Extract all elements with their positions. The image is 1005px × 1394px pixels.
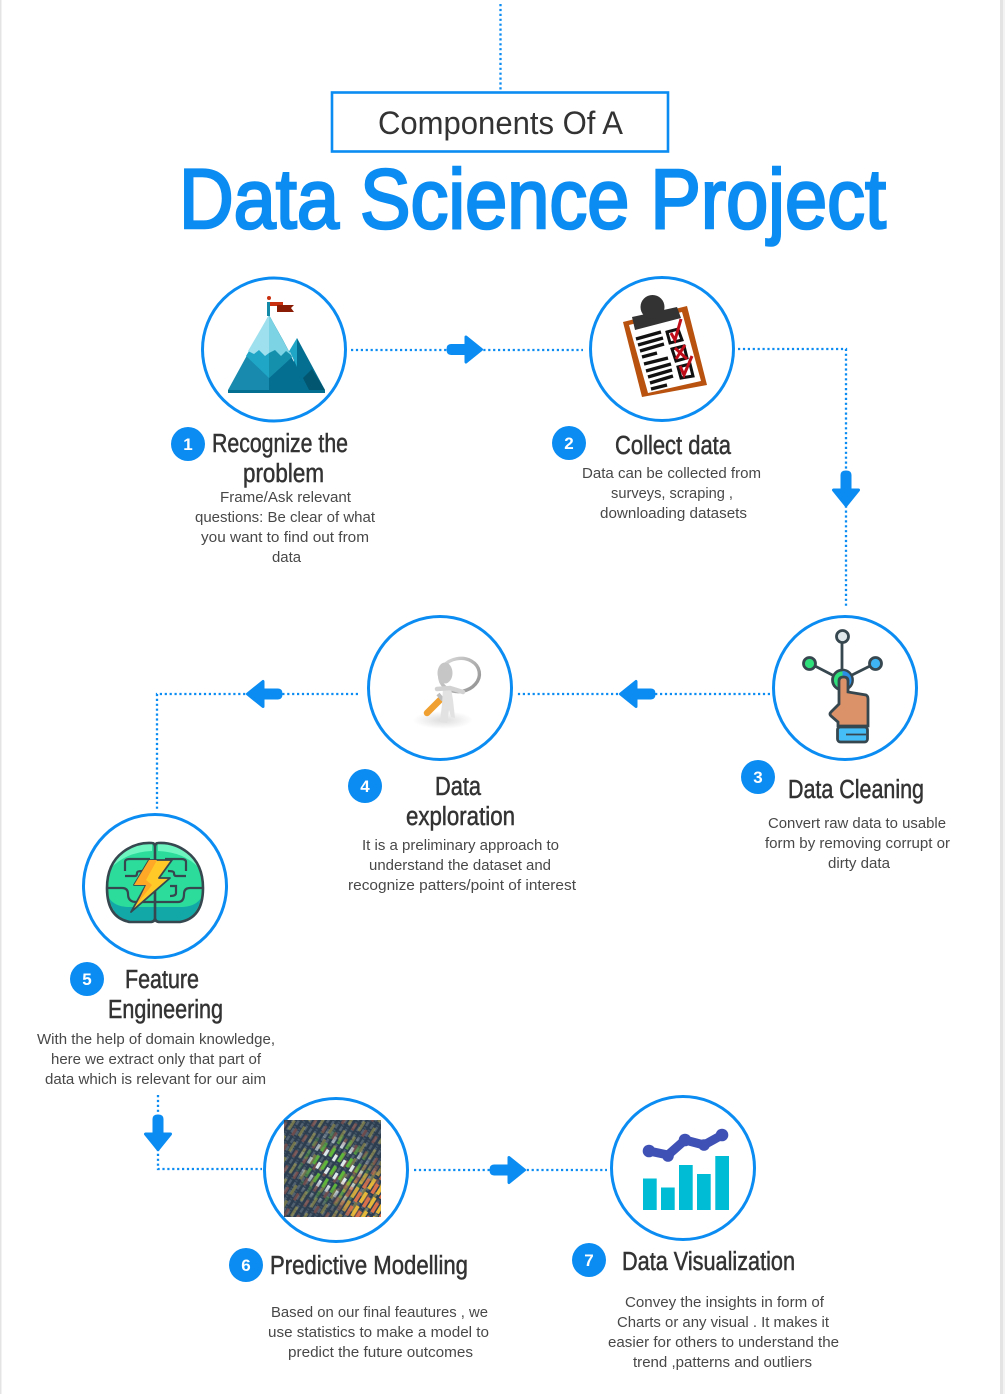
connector: top line into title xyxy=(499,4,502,92)
panel: step 4 data exploration xyxy=(348,616,576,894)
description: questions: Be clear of what xyxy=(195,510,375,526)
description: Frame/Ask relevant xyxy=(220,490,351,506)
description xyxy=(608,1295,839,1371)
heading: Engineering xyxy=(108,996,223,1024)
connector: step 3 to step 4 xyxy=(516,682,770,706)
connector: step 2 to step 3 xyxy=(738,349,858,608)
heading: Data Visualization xyxy=(622,1248,795,1276)
panel: step 5 feature engineering xyxy=(37,814,275,1088)
heading: Recognize the xyxy=(212,430,348,458)
icon: mountain with flag xyxy=(228,296,325,393)
panel: step 6 predictive modelling xyxy=(229,1098,489,1361)
panel: step 7 data visualization xyxy=(572,1096,839,1371)
number badge 1: 1 xyxy=(183,435,193,454)
number badge 1 xyxy=(171,427,205,461)
panel: step 2 collect data xyxy=(552,278,761,522)
description: Data can be collected from xyxy=(582,466,761,482)
title box: Components Of A: Components Of A xyxy=(378,105,624,141)
description: trend ,patterns and outliers xyxy=(633,1355,812,1371)
connector: step 6 to step 7 xyxy=(414,1158,607,1182)
description xyxy=(765,816,950,872)
number badge 4 xyxy=(348,769,382,803)
number badge 6: 6 xyxy=(241,1256,251,1275)
description: understand the dataset and xyxy=(369,858,551,874)
number badge 5 xyxy=(70,962,104,996)
main title: Data Science Project xyxy=(179,152,886,246)
number badge 6 xyxy=(229,1248,263,1282)
description: It is a preliminary approach to xyxy=(362,838,559,854)
description: predict the future outcomes xyxy=(288,1345,473,1361)
description: data which is relevant for our aim xyxy=(45,1072,266,1088)
heading: exploration xyxy=(406,803,515,831)
image: code on a screen xyxy=(284,1120,381,1217)
heading: problem xyxy=(243,460,324,488)
connector: step 5 to step 6 xyxy=(146,1095,262,1169)
description: With the help of domain knowledge, xyxy=(37,1032,275,1048)
description xyxy=(37,1032,275,1088)
number badge 7 xyxy=(572,1243,606,1277)
heading xyxy=(108,966,223,1024)
heading xyxy=(212,430,348,488)
number badge 2 xyxy=(552,426,586,460)
description: data xyxy=(272,550,302,566)
heading: Predictive Modelling xyxy=(270,1252,468,1280)
heading: Data Cleaning xyxy=(788,776,924,804)
description: use statistics to make a model to xyxy=(268,1325,489,1341)
description: Convey the insights in form of xyxy=(625,1295,825,1311)
number badge 3: 3 xyxy=(753,768,763,787)
heading xyxy=(406,773,515,831)
description: downloading datasets xyxy=(600,506,747,522)
description xyxy=(348,838,576,894)
description xyxy=(268,1305,489,1361)
icon: clipboard checklist xyxy=(623,295,707,397)
connector: step 4 to step 5 xyxy=(157,682,358,810)
number badge 5: 5 xyxy=(82,970,92,989)
icon: bar chart with trend line xyxy=(643,1129,729,1210)
icon: figure with magnifying glass xyxy=(413,655,482,729)
panel: step 3 data cleaning xyxy=(741,616,950,872)
heading: Data xyxy=(435,773,482,801)
description: dirty data xyxy=(828,856,891,872)
description: form by removing corrupt or xyxy=(765,836,950,852)
number badge 7: 7 xyxy=(584,1251,594,1270)
description: recognize patters/point of interest xyxy=(348,878,576,894)
description: surveys, scraping , xyxy=(611,486,733,502)
description xyxy=(195,490,375,566)
icon: brain with lightning bolt xyxy=(107,843,203,922)
description: you want to find out from xyxy=(201,530,369,546)
title box: Components Of A xyxy=(332,92,668,152)
description: easier for others to understand the xyxy=(608,1335,839,1351)
description: here we extract only that part of xyxy=(51,1052,262,1068)
panel: step 1 recognize the problem xyxy=(171,278,375,566)
connector: step 1 to step 2 xyxy=(351,337,583,362)
number badge 3 xyxy=(741,760,775,794)
number badge 2: 2 xyxy=(564,434,574,453)
icon: hand touching network node xyxy=(804,630,882,742)
description: Charts or any visual . It makes it xyxy=(617,1315,829,1331)
description xyxy=(582,466,761,522)
description: Convert raw data to usable xyxy=(768,816,946,832)
heading: Collect data xyxy=(615,432,732,460)
heading: Feature xyxy=(125,966,199,994)
description: Based on our final feautures , we xyxy=(271,1305,488,1321)
number badge 4: 4 xyxy=(360,777,370,796)
